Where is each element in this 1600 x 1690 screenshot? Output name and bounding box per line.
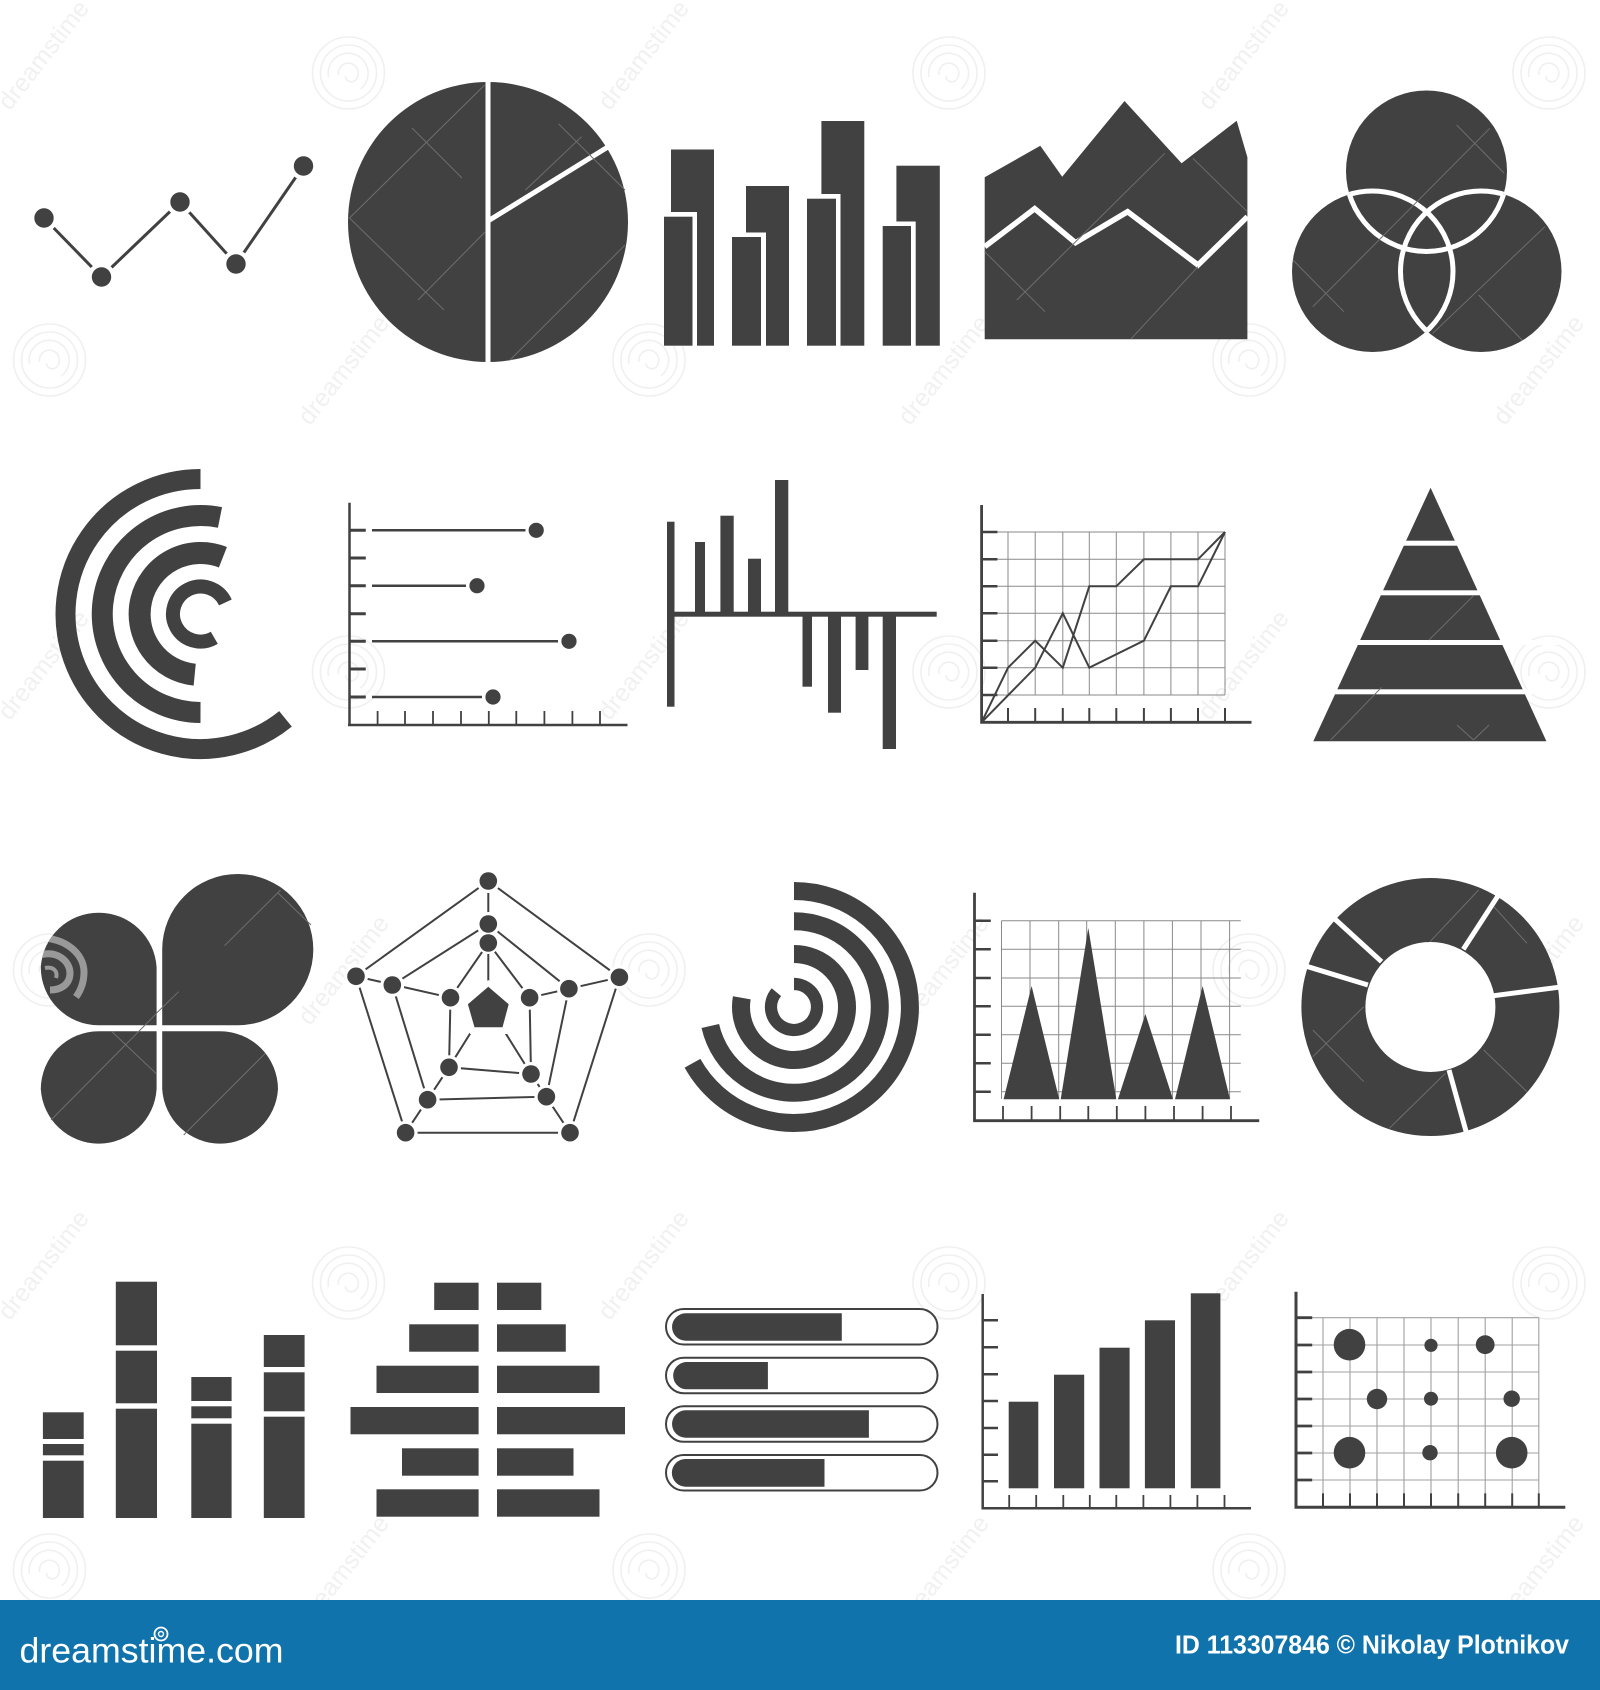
icon: pie chart — [348, 80, 628, 364]
watermark layer: dreamstime — [1487, 910, 1590, 1030]
watermark layer: dreamstime — [892, 910, 995, 1030]
icon: segmented bars — [43, 1282, 305, 1518]
footer logo: dreamstime.com — [20, 1632, 284, 1670]
icon: segmented donut chart — [1298, 893, 1566, 1138]
watermark layer: dreamstime — [1487, 1510, 1590, 1630]
footer band — [0, 1600, 1600, 1690]
watermark hairlines over dark shapes — [51, 85, 1545, 1135]
watermark layer: dreamstime — [1487, 310, 1590, 430]
watermark layer: dreamstime — [292, 910, 395, 1030]
icon: area chart — [985, 101, 1247, 339]
watermark layer: dreamstime — [292, 1510, 395, 1630]
icon: rising bar chart — [983, 1293, 1251, 1508]
icon: venn diagram — [1292, 90, 1562, 352]
footer credit: ID 113307846 © Nikolay Plotnikov — [1175, 1631, 1570, 1659]
icon: radar chart — [344, 869, 631, 1145]
watermark layer: dreamstime — [1192, 605, 1295, 725]
icon: concentric arc chart — [66, 479, 286, 749]
icon: radial progress arcs — [692, 891, 910, 1123]
watermark layer: dreamstime — [892, 1510, 995, 1630]
icon: tornado chart — [350, 1283, 625, 1517]
watermark layer: dreamstime — [892, 310, 995, 430]
icon: progress bars — [666, 1309, 938, 1490]
icon: overlapping bar chart — [664, 121, 940, 346]
watermark layer: dreamstime — [592, 1205, 695, 1325]
icon: line chart with dots — [30, 152, 318, 291]
icon: lollipop chart — [348, 503, 628, 725]
icon: dual line chart on grid — [982, 505, 1252, 722]
watermark layer: dreamstime — [292, 310, 395, 430]
icon: triangle chart on grid — [974, 893, 1259, 1121]
icon: diverging bar chart — [667, 480, 937, 749]
icon: bubble scatter chart — [1296, 1292, 1565, 1507]
icon: layered pyramid — [1300, 488, 1560, 741]
watermark layer: dreamstime — [1192, 1205, 1295, 1325]
watermark layer: dreamstime — [592, 605, 695, 725]
icon: four petal chart — [40, 874, 313, 1144]
